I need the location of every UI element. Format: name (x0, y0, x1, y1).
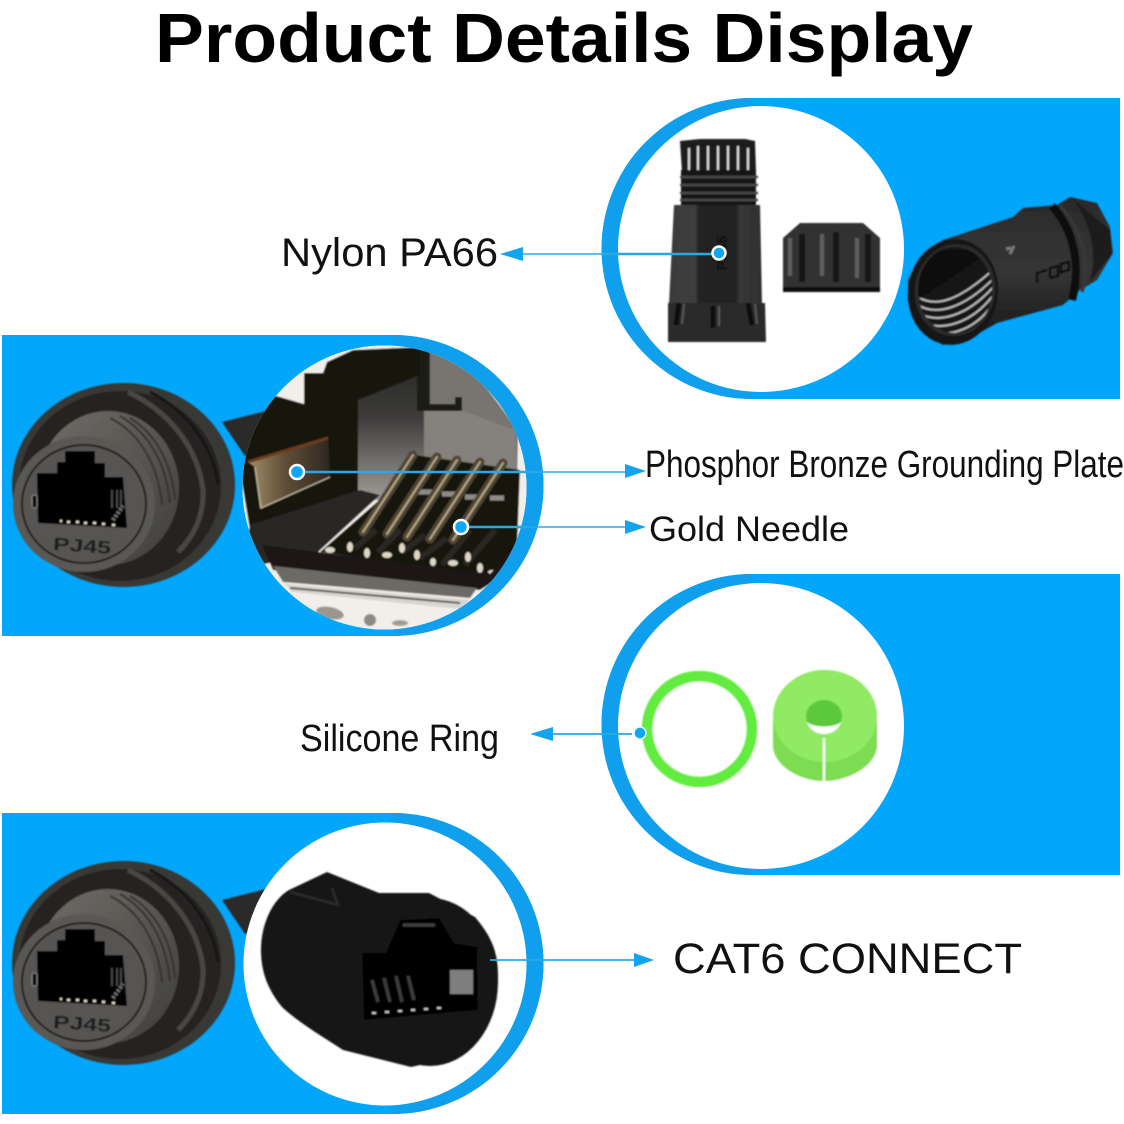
cable (222, 410, 270, 456)
threaded collar (37, 889, 179, 1043)
grounding plate (248, 438, 330, 508)
callout line (490, 959, 635, 961)
panel: CAT6 connect (2, 813, 635, 1114)
panel: nylon PA66 (522, 98, 1120, 399)
label: gold needle: Gold Needle (649, 510, 849, 549)
black base band (262, 545, 520, 590)
arrow: gold needle (625, 520, 646, 534)
assembled connector (901, 197, 1113, 351)
label: Nylon PA66: Nylon PA66 (281, 231, 498, 275)
label: silicone ring: Silicone Ring (300, 718, 499, 760)
white circle (244, 822, 526, 1106)
pin bed (320, 455, 520, 576)
RJ45 connector (12, 383, 270, 587)
bright gaps between pins (418, 492, 504, 498)
green silicone washer (773, 670, 877, 781)
callout dots and lines (290, 465, 628, 534)
arrow: Nylon PA66 (500, 247, 523, 261)
circuit board strip (273, 566, 477, 598)
flange silhouette (12, 861, 235, 1065)
magnified jack photo (240, 345, 530, 630)
callout dot and line (552, 727, 646, 739)
RJ45 port opening (37, 451, 127, 528)
white circle (618, 106, 904, 392)
label: CAT6 connect: CAT6 CONNECT (673, 935, 1022, 983)
title: Product Details Display (155, 0, 973, 77)
green silicone ring (647, 676, 752, 782)
arrow: phosphor bronze (625, 464, 646, 478)
panel background (601, 574, 1120, 875)
arrow: silicone ring (530, 727, 553, 741)
jack black notch (417, 347, 462, 411)
RJ45 port opening (37, 929, 127, 1006)
gold pins (363, 455, 503, 540)
CAT6 coupler (261, 872, 498, 1067)
white circle (242, 346, 526, 630)
rim arc (601, 574, 752, 875)
panel background (602, 98, 1120, 399)
panel background (2, 335, 544, 636)
jack grey housing (428, 352, 519, 470)
lower slope (248, 489, 380, 565)
solder points (325, 542, 496, 574)
panel background (2, 813, 544, 1114)
front face (13, 914, 155, 1050)
molded marking on gland: PJ45 (714, 235, 731, 271)
panel: silicone ring (552, 574, 1120, 875)
rim arc (393, 813, 544, 1114)
cable (222, 888, 270, 934)
panel: phosphor bronze and gold needle (2, 335, 628, 636)
PJ45 marking: PJ45 (52, 1012, 112, 1036)
white circle (618, 583, 904, 869)
PJ45 marking: PJ45 (52, 534, 112, 558)
jack dark housing (240, 347, 420, 530)
RJ45 connector (12, 861, 270, 1065)
arrow: CAT6 connect (634, 953, 654, 967)
rim arc (393, 335, 544, 636)
connector gland body (668, 139, 766, 342)
front face (13, 436, 155, 572)
callout line and dot (522, 246, 726, 260)
rim arc (602, 98, 752, 399)
flange silhouette (12, 383, 235, 587)
threaded collar (37, 411, 179, 565)
hex nut (783, 223, 880, 292)
coupler port opening (362, 918, 478, 1020)
